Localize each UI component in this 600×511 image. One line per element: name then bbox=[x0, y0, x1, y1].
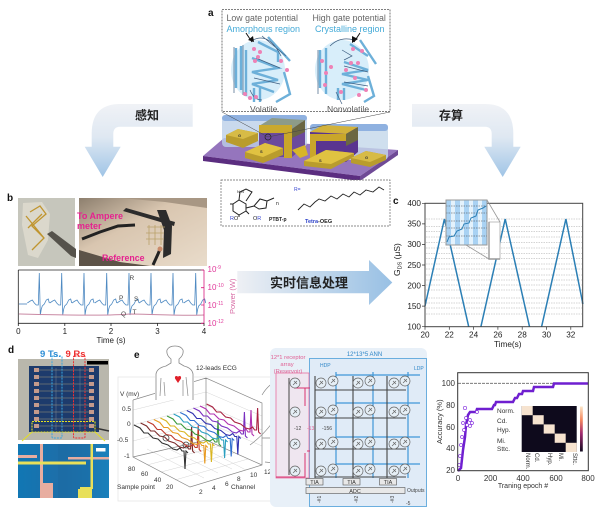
inset confusion matrix: Sttc. bbox=[571, 453, 577, 465]
chart: 12-lead ECG 3D plot: 8 bbox=[237, 476, 241, 483]
readout circuit: TIA and ADC: ADC bbox=[349, 489, 361, 495]
network labels: LDP bbox=[414, 366, 424, 372]
accuracy curve bbox=[458, 384, 588, 471]
inset confusion matrix: Norm. bbox=[497, 408, 515, 415]
inset confusion matrix: Mi. bbox=[497, 438, 506, 445]
photo: device on arm: To Ampere bbox=[77, 211, 123, 221]
photo: flexible device bbox=[18, 198, 76, 266]
inset confusion matrix: Hyp. bbox=[546, 453, 552, 466]
diagram: crystalline polymer bbox=[315, 33, 376, 104]
caption: volatile: Volatile bbox=[250, 104, 278, 114]
open markers bbox=[458, 406, 478, 466]
heading: receptor array: array bbox=[280, 362, 294, 368]
chart: conductance vs time: 30 bbox=[542, 330, 551, 340]
chart: 12-lead ECG 3D plot: 0.5 bbox=[122, 406, 131, 413]
readout circuit: TIA and ADC: TIA bbox=[347, 480, 356, 486]
chart: 12-lead ECG 3D plot: 0 bbox=[127, 421, 131, 428]
chart: conductance vs time: (μS) bbox=[392, 243, 402, 262]
readout circuit: TIA and ADC bbox=[306, 478, 405, 495]
chart: conductance vs time: 200 bbox=[407, 282, 421, 290]
network labels: -#3 bbox=[390, 496, 396, 503]
device stack bbox=[203, 112, 398, 181]
axes: Accuracy (%) bbox=[435, 399, 444, 444]
chart: 12-lead ECG 3D plot: Channel bbox=[231, 484, 256, 491]
chart: 12-lead ECG 3D plot: V (mv) bbox=[120, 391, 139, 398]
chemical structure box: Tetra-OEG bbox=[305, 219, 332, 225]
panel b: ECG sensing bbox=[7, 193, 237, 345]
chart: conductance vs time: 28 bbox=[518, 330, 527, 340]
inset confusion matrix: Sttc. bbox=[497, 446, 510, 453]
label c: c bbox=[393, 196, 399, 207]
label a: a bbox=[208, 8, 214, 19]
network labels: -13 bbox=[307, 426, 314, 432]
network labels: -#2 bbox=[354, 496, 360, 503]
photo: device on arm: Reference bbox=[102, 253, 145, 263]
photo: device on arm bbox=[77, 198, 207, 266]
device stack: G bbox=[238, 133, 241, 138]
chart: ECG and power: 1 bbox=[63, 327, 68, 336]
chart: ECG and power: Q bbox=[121, 311, 126, 318]
network labels: -156 bbox=[322, 426, 332, 432]
axes: 600 bbox=[549, 474, 563, 483]
network background bbox=[270, 348, 427, 507]
chemical structure box: N N bbox=[237, 189, 244, 194]
chart: 12-lead ECG 3D plot: 6 bbox=[225, 481, 229, 488]
chemical structure box: OR bbox=[253, 216, 261, 222]
heading: high gate potential: High gate potential bbox=[312, 13, 386, 23]
reservoir box bbox=[276, 373, 309, 478]
chart: 12-lead ECG 3D plot: -0.5 bbox=[117, 437, 129, 444]
chart: 12-lead ECG 3D plot: 80 bbox=[128, 466, 136, 473]
colour scale bbox=[580, 406, 583, 452]
network labels: -#1 bbox=[317, 496, 323, 503]
axes bbox=[435, 373, 595, 490]
chart: ECG and power: 10 bbox=[208, 301, 216, 310]
chart: conductance vs time: 350 bbox=[407, 220, 421, 228]
axes: 200 bbox=[484, 474, 498, 483]
icon: heart bbox=[175, 376, 181, 383]
chemical structure box bbox=[221, 180, 390, 226]
chart: conductance vs time: 400 bbox=[407, 199, 421, 208]
chart: 12-lead ECG 3D plot: 60 bbox=[141, 471, 149, 478]
heading: receptor array: (Reservoir) bbox=[274, 369, 302, 375]
chart: ECG and power: P bbox=[119, 295, 123, 302]
chemical structure box: RO bbox=[230, 216, 239, 222]
ANN region box bbox=[310, 358, 426, 506]
chemical structure box: PTBT-p bbox=[269, 217, 286, 223]
chart: conductance vs time: 100 bbox=[407, 322, 421, 332]
chart: 12-lead ECG 3D plot: 2 bbox=[199, 489, 203, 496]
inset confusion matrix: Hyp. bbox=[497, 427, 511, 434]
grey reference line bbox=[458, 382, 588, 384]
inset confusion matrix: Mi. bbox=[557, 453, 563, 461]
heading: receptor array bbox=[271, 355, 305, 375]
inset confusion matrix: Norm. bbox=[524, 453, 530, 470]
chart: conductance vs time: 250 bbox=[407, 261, 421, 270]
chart: conductance vs time: 20 bbox=[420, 330, 430, 340]
chart: conductance vs time: G bbox=[392, 269, 402, 276]
chart: ECG and power: Time (s) bbox=[96, 336, 126, 345]
heading: crystalline region: Crystalline region bbox=[315, 24, 385, 34]
chart: 12-lead ECG 3D plot: -1 bbox=[124, 453, 130, 460]
network labels: HDP bbox=[320, 363, 331, 369]
chart: ECG and power: 3 bbox=[155, 327, 160, 336]
axes: 20 bbox=[446, 466, 456, 475]
crossbar lines bbox=[276, 372, 420, 478]
readout circuit: TIA and ADC: TIA bbox=[310, 480, 319, 486]
chart: ECG and power: 10 bbox=[208, 265, 216, 274]
chart: conductance vs time: 32 bbox=[566, 330, 576, 340]
chart: ECG and power: -12 bbox=[216, 319, 224, 325]
morphology inset box bbox=[222, 10, 390, 112]
photo: array chip bbox=[18, 349, 109, 440]
chart: ECG and power: 0 bbox=[16, 327, 21, 336]
arrow: sensing bbox=[85, 104, 193, 177]
chart: 12-lead ECG 3D plot bbox=[117, 377, 274, 501]
chart: ECG and power: R bbox=[130, 275, 134, 282]
connector lines bbox=[22, 432, 105, 441]
transistor grid bbox=[290, 376, 410, 476]
heading: receptor array: 12*1 receptor bbox=[271, 355, 305, 361]
device stack: S bbox=[260, 149, 263, 154]
chemical structure box: n bbox=[276, 201, 279, 207]
caption: nonvolatile: Nonvolatile bbox=[327, 104, 369, 114]
chart: 12-lead ECG 3D plot: 20 bbox=[166, 484, 174, 491]
device stack: G bbox=[365, 155, 368, 160]
photo: array chip: 9 Rs bbox=[66, 349, 86, 360]
chart: conductance vs time: DS bbox=[398, 261, 404, 269]
axes: Traning epoch # bbox=[498, 483, 548, 490]
network labels: -5 bbox=[406, 501, 411, 507]
chart: 12-lead ECG 3D plot: 4 bbox=[212, 485, 216, 492]
network labels: -12 bbox=[294, 426, 301, 432]
chart: conductance vs time: 150 bbox=[407, 302, 421, 311]
diagram: amorphous polymer bbox=[231, 33, 290, 102]
chart: ECG and power: 10 bbox=[208, 283, 216, 292]
axes: 60 bbox=[446, 423, 456, 432]
chart: 12-lead ECG 3D plot: Sample point bbox=[117, 484, 155, 491]
chart: ECG and power: 2 bbox=[109, 327, 114, 336]
network labels: Outputs bbox=[407, 488, 425, 494]
panel: training accuracy chart bbox=[435, 373, 595, 490]
axes: 800 bbox=[581, 474, 595, 483]
inset confusion matrix bbox=[497, 406, 583, 470]
axes: 0 bbox=[456, 474, 461, 483]
readout circuit: TIA and ADC: TIA bbox=[384, 480, 393, 486]
chart: conductance vs time: 300 bbox=[407, 240, 421, 249]
icon: human torso bbox=[155, 344, 194, 400]
axes: 40 bbox=[446, 444, 456, 453]
panel e: reservoir network bbox=[117, 344, 427, 507]
heading: amorphous region: Amorphous region bbox=[226, 24, 300, 34]
photo: device on arm: meter bbox=[77, 221, 102, 231]
chart: ECG and power: T bbox=[132, 309, 136, 316]
label b: b bbox=[7, 193, 13, 204]
caption: 12-leads ECG: 12-leads ECG bbox=[196, 365, 237, 372]
chart: conductance vs time: Time(s) bbox=[494, 340, 522, 349]
chart: ECG and power: -11 bbox=[216, 301, 223, 307]
chart: ECG and power: 10 bbox=[208, 319, 216, 328]
chart: 12-lead ECG 3D plot: 12 bbox=[264, 469, 272, 476]
arrow: computing bbox=[412, 104, 521, 177]
chart: conductance vs time: 22 bbox=[445, 330, 454, 340]
photo: magnified electrodes bbox=[18, 444, 109, 498]
device stack: S bbox=[319, 158, 322, 163]
chart: conductance vs time bbox=[392, 199, 583, 349]
axes: 100 bbox=[442, 379, 456, 388]
chart: ECG and power: S bbox=[134, 296, 139, 303]
chemical structure box: R= bbox=[294, 187, 301, 193]
inset confusion matrix: Cd. bbox=[533, 453, 539, 463]
chart: conductance vs time: 24 bbox=[469, 330, 479, 340]
arrow: sensing: 感知 bbox=[135, 108, 159, 122]
arrow: real-time processing: 实时信息处理 bbox=[270, 276, 348, 290]
heading: ANN: 12*13*5 ANN bbox=[347, 352, 382, 358]
axes: 80 bbox=[446, 401, 456, 410]
chart: ECG and power: -9 bbox=[216, 265, 221, 271]
arrow: computing: 存算 bbox=[439, 108, 463, 122]
chart: ECG and power bbox=[16, 265, 237, 345]
chart: ECG and power: 4 bbox=[202, 327, 207, 336]
network labels bbox=[294, 363, 425, 507]
panel c: conductance chart bbox=[392, 196, 583, 349]
chart: 12-lead ECG 3D plot: 40 bbox=[154, 477, 162, 484]
heading: low gate potential: Low gate potential bbox=[226, 13, 298, 23]
photo: array chip: 9 Ts. bbox=[40, 349, 61, 360]
label e: e bbox=[134, 350, 140, 361]
panel a: organic transistor bbox=[203, 8, 398, 226]
ECG signal connectors bbox=[250, 378, 302, 466]
label d: d bbox=[8, 345, 14, 356]
chart: conductance vs time: 26 bbox=[493, 330, 503, 340]
panel d: device array photos bbox=[8, 345, 109, 498]
chart: 12-lead ECG 3D plot: 10 bbox=[250, 472, 258, 479]
chart: ECG and power: Power (W) bbox=[228, 278, 237, 314]
inset confusion matrix: Cd. bbox=[497, 418, 507, 425]
chart: ECG and power: -10 bbox=[216, 283, 224, 289]
arrow: real-time processing bbox=[237, 260, 392, 305]
axes: 400 bbox=[516, 474, 530, 483]
zoom inset: stepped conductance bbox=[446, 200, 500, 259]
